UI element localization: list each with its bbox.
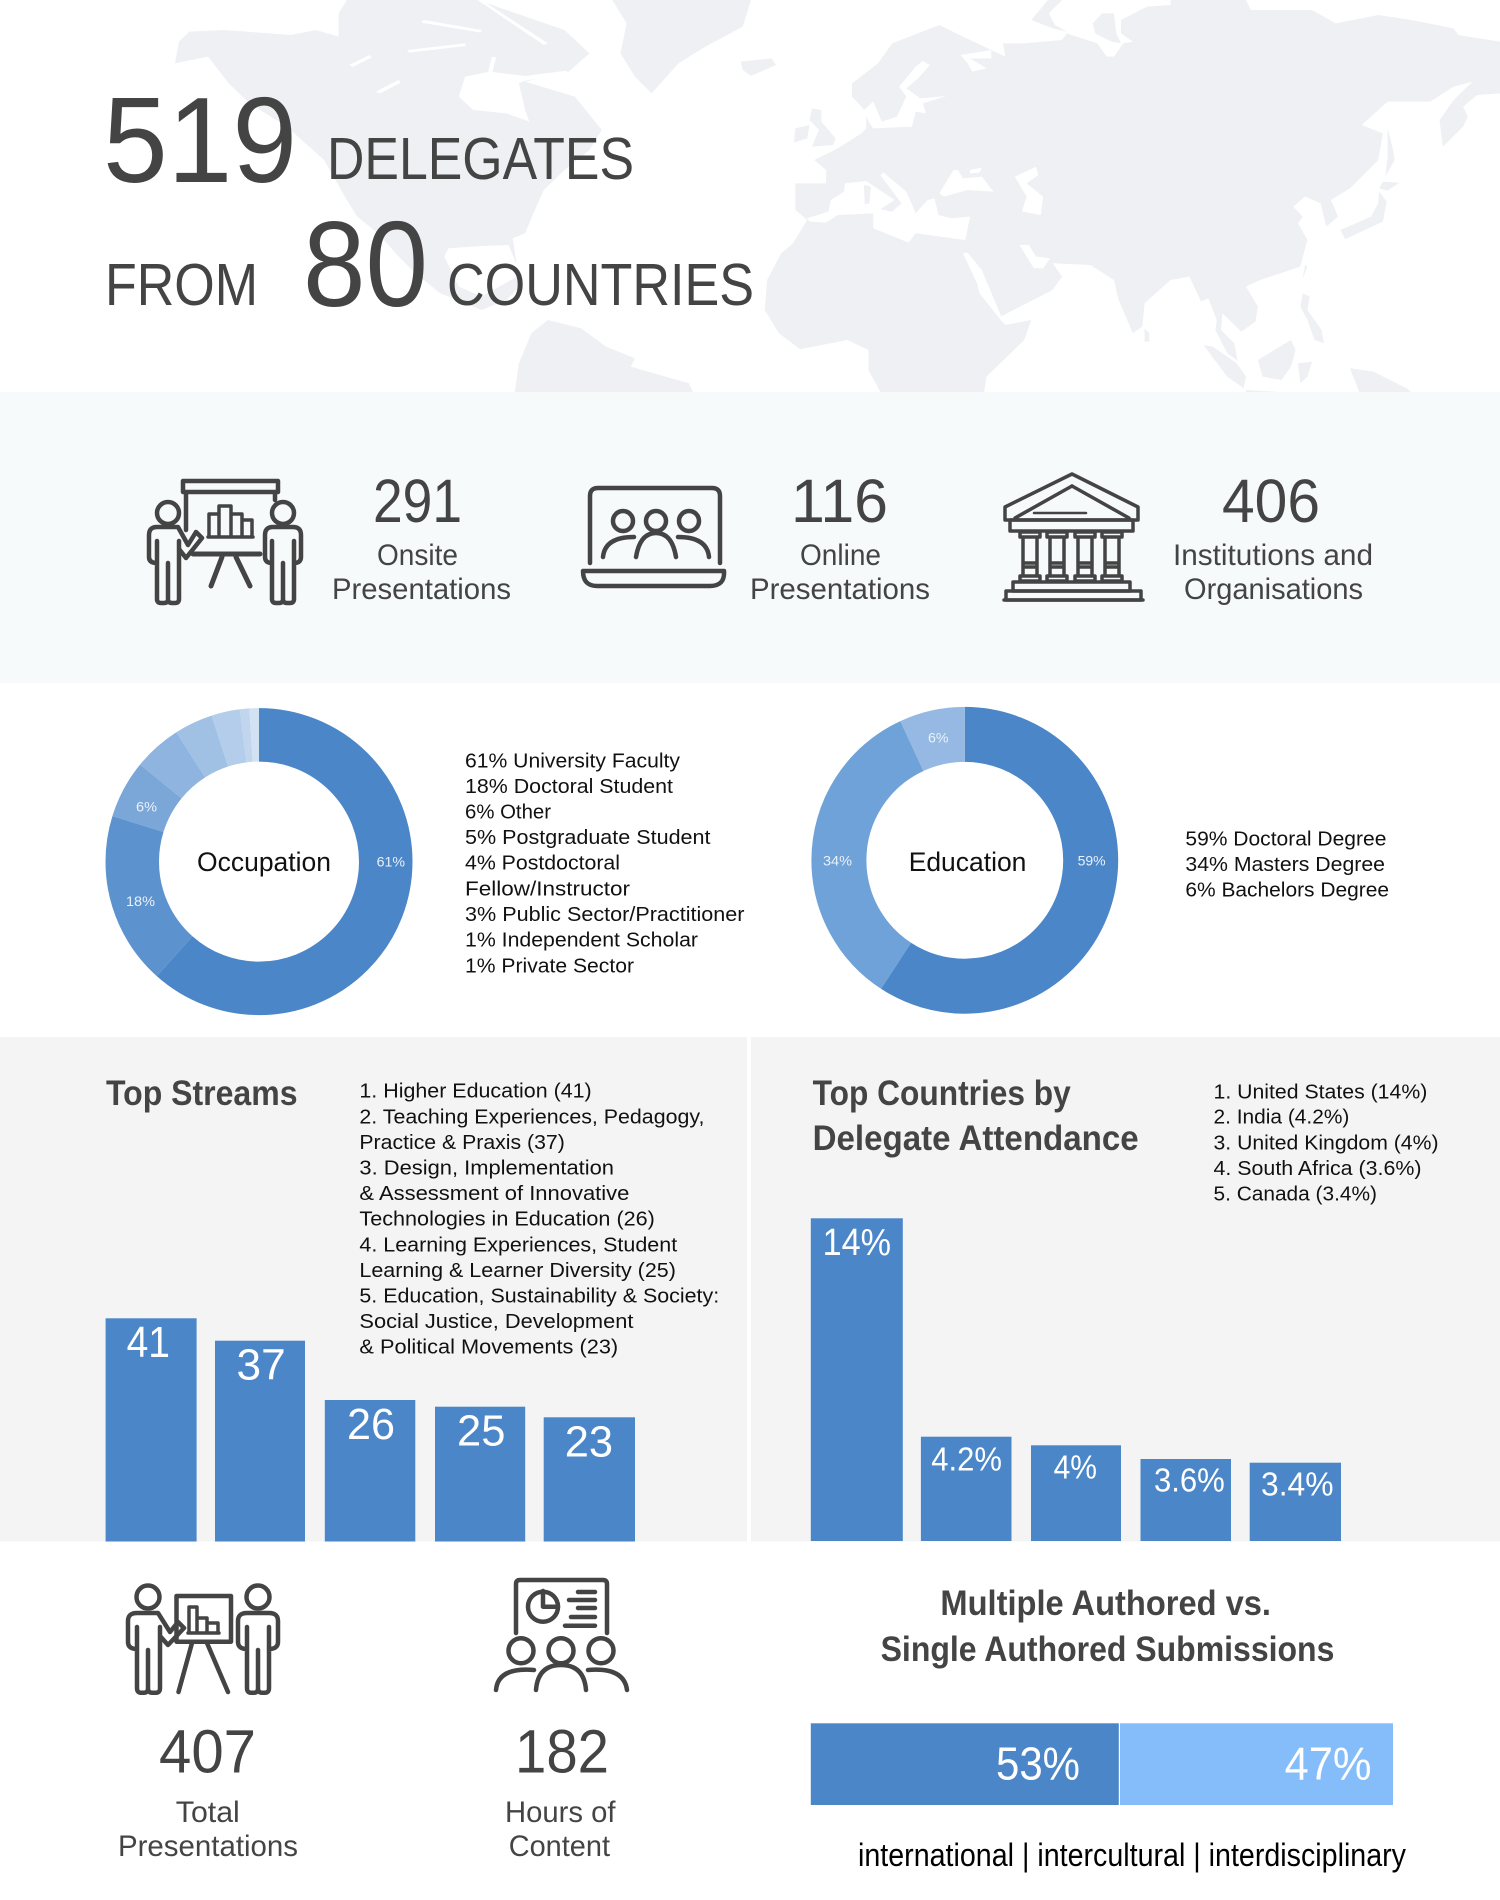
stat: 291 onsite presentations: Presentations bbox=[332, 573, 511, 606]
stat: 407 total presentations: 407 bbox=[159, 1718, 256, 1786]
bar chart: top streams: 23 bbox=[565, 1418, 613, 1467]
title: 519 bbox=[103, 72, 297, 208]
legend: occupation: 18% Doctoral Student bbox=[465, 776, 673, 798]
stacked bar: authorship share bbox=[811, 1723, 1393, 1805]
title: FROM bbox=[105, 252, 258, 318]
stat: 407 total presentations: Presentations bbox=[118, 1830, 298, 1863]
legend: occupation: 3% Public Sector/Practitioner bbox=[465, 904, 745, 926]
stacked bar: authorship share: 53% bbox=[996, 1737, 1080, 1789]
stat: 116 online presentations: Online bbox=[800, 539, 881, 572]
title: 80 bbox=[303, 196, 428, 332]
list: top countries: 3. United Kingdom (4%) bbox=[1214, 1132, 1438, 1154]
heading: top countries: Delegate Attendance bbox=[813, 1119, 1139, 1158]
bar chart: top countries: 3.4% bbox=[1261, 1466, 1334, 1503]
stat: 291 onsite presentations: 291 bbox=[373, 467, 462, 535]
panel: top countries bbox=[751, 1037, 1500, 1542]
legend: occupation: 6% Other bbox=[465, 802, 551, 824]
bar chart: top streams: 37 bbox=[236, 1340, 286, 1389]
stat: 116 online presentations: Presentations bbox=[750, 573, 930, 606]
legend: education: 6% Bachelors Degree bbox=[1185, 880, 1389, 902]
bar chart: top streams bbox=[106, 1318, 635, 1542]
icon: presenters with small board bbox=[128, 1586, 278, 1693]
stat: 182 hours of content: 182 bbox=[515, 1718, 609, 1786]
donut chart: education: 6% bbox=[928, 730, 948, 746]
heading: multiple vs single authored bbox=[881, 1584, 1334, 1669]
legend: occupation: Fellow/Instructor bbox=[465, 878, 630, 900]
legend: occupation: 4% Postdoctoral bbox=[465, 853, 620, 875]
title: COUNTRIES bbox=[447, 252, 754, 318]
bar chart: top streams: 26 bbox=[347, 1400, 395, 1449]
legend: education bbox=[1185, 829, 1389, 902]
list: top streams: 4. Learning Experiences, Student bbox=[359, 1234, 678, 1256]
list: top streams: & Assessment of Innovative bbox=[359, 1183, 629, 1205]
donut chart: occupation: Occupation bbox=[197, 847, 331, 877]
donut chart: education: Education bbox=[909, 847, 1026, 877]
list: top streams: Technologies in Education (26) bbox=[359, 1209, 655, 1231]
bar chart: top countries bbox=[811, 1218, 1341, 1541]
legend: occupation: 1% Independent Scholar bbox=[465, 930, 698, 952]
tagline: international | intercultural | interdisciplinary bbox=[858, 1837, 1406, 1873]
heading: multiple vs single authored: Multiple Authored vs. bbox=[940, 1584, 1271, 1623]
title: DELEGATES bbox=[327, 126, 634, 192]
list: top streams: Learning & Learner Diversity (25) bbox=[359, 1260, 676, 1282]
legend: occupation: 61% University Faculty bbox=[465, 750, 680, 772]
stat: 407 total presentations bbox=[118, 1718, 298, 1863]
donut chart: education: 34% bbox=[823, 853, 852, 869]
stacked bar: authorship share: 47% bbox=[1285, 1737, 1372, 1789]
list: top countries: 5. Canada (3.4%) bbox=[1214, 1184, 1377, 1206]
donut chart: education: 59% bbox=[1078, 853, 1106, 869]
bar chart: top countries: 4% bbox=[1054, 1448, 1097, 1485]
list: top streams bbox=[359, 1081, 719, 1359]
bar chart: top streams: 25 bbox=[457, 1407, 505, 1456]
stat: 291 onsite presentations: Onsite bbox=[377, 539, 458, 572]
legend: education: 59% Doctoral Degree bbox=[1185, 829, 1386, 851]
stat: 182 hours of content: Content bbox=[509, 1830, 611, 1863]
stat: 116 online presentations bbox=[750, 467, 930, 606]
legend: occupation: 5% Postgraduate Student bbox=[465, 827, 711, 849]
title bbox=[103, 72, 754, 332]
list: top countries: 2. India (4.2%) bbox=[1214, 1107, 1349, 1129]
legend: occupation: 1% Private Sector bbox=[465, 955, 634, 977]
icon: institution building bbox=[1004, 474, 1143, 600]
list: top streams: 5. Education, Sustainability & Society: bbox=[359, 1286, 719, 1308]
bar chart: top countries: 3.6% bbox=[1154, 1462, 1225, 1499]
list: top streams: Practice & Praxis (37) bbox=[359, 1132, 565, 1154]
list: top streams: 1. Higher Education (41) bbox=[359, 1081, 592, 1103]
icon: audience with screen bbox=[496, 1580, 627, 1690]
panel: presentation stats band bbox=[0, 392, 1500, 683]
stat: 406 institutions and organisations: Organisations bbox=[1184, 573, 1363, 606]
heading: top countries: Top Countries by bbox=[813, 1074, 1071, 1113]
donut chart: education bbox=[823, 730, 1106, 986]
bar chart: top streams: 41 bbox=[127, 1318, 170, 1367]
list: top countries: 1. United States (14%) bbox=[1214, 1081, 1427, 1103]
donut chart: occupation: 18% bbox=[126, 893, 155, 909]
heading: top countries bbox=[813, 1074, 1139, 1158]
stat: 291 onsite presentations bbox=[332, 467, 511, 606]
donut chart: occupation bbox=[126, 735, 405, 988]
list: top countries: 4. South Africa (3.6%) bbox=[1214, 1158, 1422, 1180]
list: top streams: 2. Teaching Experiences, Pedagogy, bbox=[359, 1106, 704, 1128]
donut chart: occupation: 61% bbox=[377, 854, 405, 870]
stat: 406 institutions and organisations: 406 bbox=[1222, 467, 1320, 535]
panel: top streams bbox=[0, 1037, 747, 1542]
world map background bbox=[175, 0, 1500, 392]
list: top countries bbox=[1214, 1081, 1438, 1206]
bar chart: top countries: 4.2% bbox=[931, 1441, 1002, 1478]
legend: occupation bbox=[465, 750, 745, 977]
heading: multiple vs single authored: Single Authored Submissions bbox=[881, 1630, 1334, 1669]
icon: laptop with audience bbox=[583, 488, 724, 586]
bar chart: top countries: 14% bbox=[823, 1222, 891, 1264]
list: top streams: & Political Movements (23) bbox=[359, 1337, 618, 1359]
stat: 407 total presentations: Total bbox=[176, 1796, 240, 1829]
stat: 116 online presentations: 116 bbox=[791, 467, 888, 535]
heading: top streams: Top Streams bbox=[106, 1074, 298, 1113]
stat: 182 hours of content bbox=[505, 1718, 616, 1863]
list: top streams: 3. Design, Implementation bbox=[359, 1158, 614, 1180]
donut chart: occupation: 6% bbox=[136, 799, 157, 815]
stat: 406 institutions and organisations: Institutions and bbox=[1173, 539, 1373, 572]
stat: 406 institutions and organisations bbox=[1173, 467, 1373, 606]
stat: 182 hours of content: Hours of bbox=[505, 1796, 616, 1829]
icon: presenters with board bbox=[149, 481, 301, 603]
legend: education: 34% Masters Degree bbox=[1185, 854, 1385, 876]
list: top streams: Social Justice, Development bbox=[359, 1311, 634, 1333]
